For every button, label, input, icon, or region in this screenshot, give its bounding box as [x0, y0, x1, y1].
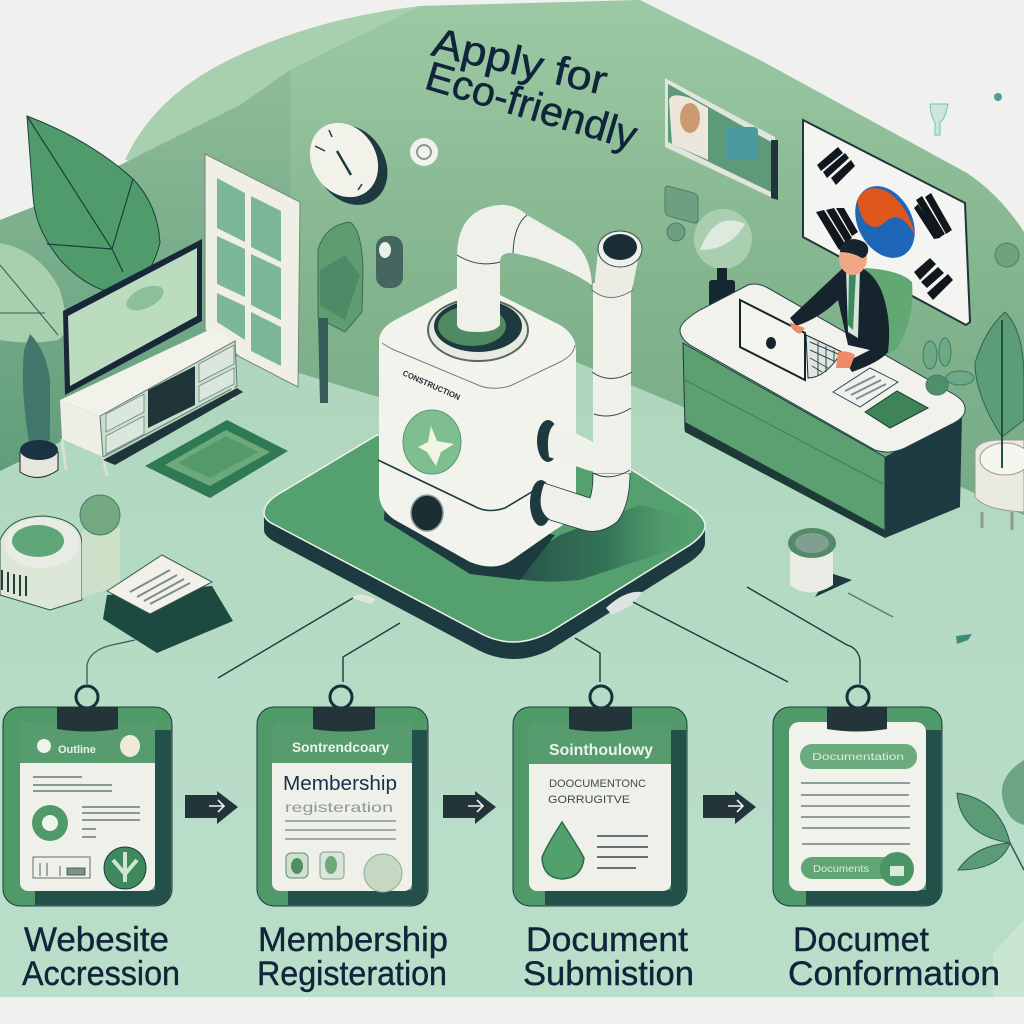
wall badge under title — [410, 138, 438, 166]
side connector pipe — [548, 423, 595, 472]
chair — [862, 268, 912, 356]
model label: CONSTRUCTION — [401, 369, 462, 402]
plant bottom right — [957, 760, 1024, 870]
pale leaf — [0, 243, 70, 342]
connector lines — [87, 587, 893, 684]
tv screen — [63, 239, 202, 395]
arrow 2 — [443, 791, 496, 824]
back wall — [290, 0, 1024, 530]
step card 2: membership: Sontrendcoary — [292, 739, 389, 755]
wall droplets — [930, 93, 1019, 267]
step card 3: submission: Sointhoulowy — [549, 742, 653, 759]
wall screen — [665, 78, 778, 200]
korean flag — [803, 120, 970, 325]
arrow 3 — [703, 791, 756, 824]
lower socket — [530, 480, 552, 526]
wall key pad — [376, 236, 403, 288]
step card 2: membership: Membership — [283, 773, 397, 795]
side bin — [788, 528, 852, 597]
eco badge — [403, 410, 461, 474]
lower elbow pipe — [540, 473, 630, 531]
step labels: Registeration — [257, 955, 447, 993]
vertical pipe — [593, 290, 631, 473]
title: Apply for — [428, 19, 612, 104]
step card 3: submission: DOOCUMENTONC — [549, 778, 646, 790]
desk paper — [833, 368, 898, 407]
step card 1: website: Outline — [58, 744, 96, 756]
arrow 1 — [185, 791, 238, 824]
small potted plant — [20, 334, 58, 478]
filter machine — [378, 205, 642, 580]
step card 4: confirmation: Documents — [813, 864, 869, 875]
step card 4: confirmation — [773, 686, 942, 906]
green gap — [576, 468, 594, 500]
floor jar — [80, 495, 120, 598]
door — [205, 154, 300, 387]
pipe mouth — [594, 250, 640, 290]
step labels: Webesite — [24, 921, 169, 959]
rug — [145, 420, 288, 498]
step labels: Conformation — [788, 955, 1000, 993]
step labels: Document — [526, 921, 689, 959]
desk plant — [923, 338, 974, 395]
floor — [0, 330, 1024, 997]
step labels: Documet — [793, 921, 930, 959]
platform — [264, 435, 705, 659]
outlet hole — [411, 495, 443, 531]
step labels: Accression — [22, 955, 180, 993]
machine shadow — [500, 505, 700, 582]
step card 3: submission — [513, 686, 687, 906]
wall device — [318, 222, 363, 403]
floor marker — [956, 634, 972, 644]
title: Eco-friendly — [420, 53, 643, 159]
big leaf — [27, 116, 160, 293]
step card 4: confirmation: Documentation — [812, 752, 904, 763]
bottom strip — [0, 997, 1024, 1024]
right plant — [975, 312, 1024, 530]
step card 3: submission: GORRUGITVE — [548, 794, 630, 806]
desk pouch — [865, 391, 928, 428]
bottom right pale corner — [993, 920, 1024, 997]
step labels — [22, 921, 1000, 993]
left wall — [0, 70, 290, 480]
floor drum — [0, 516, 82, 610]
step card 2: membership: registeration — [285, 799, 393, 815]
clock — [296, 110, 402, 219]
machine body — [384, 500, 555, 580]
top ring — [428, 299, 528, 361]
tv console — [60, 328, 243, 476]
laptop — [740, 300, 855, 380]
step labels: Membership — [258, 921, 448, 959]
wall switches — [665, 185, 698, 241]
floor book — [103, 555, 233, 653]
desk — [680, 284, 965, 538]
person — [790, 239, 889, 372]
step labels: Submistion — [523, 955, 694, 993]
step card 1: website — [3, 686, 172, 906]
upper socket — [537, 420, 559, 462]
step card 2: membership — [257, 686, 428, 906]
upper pipe run — [457, 205, 592, 332]
globe lamp — [694, 209, 752, 308]
pale wall blob — [125, 0, 650, 180]
